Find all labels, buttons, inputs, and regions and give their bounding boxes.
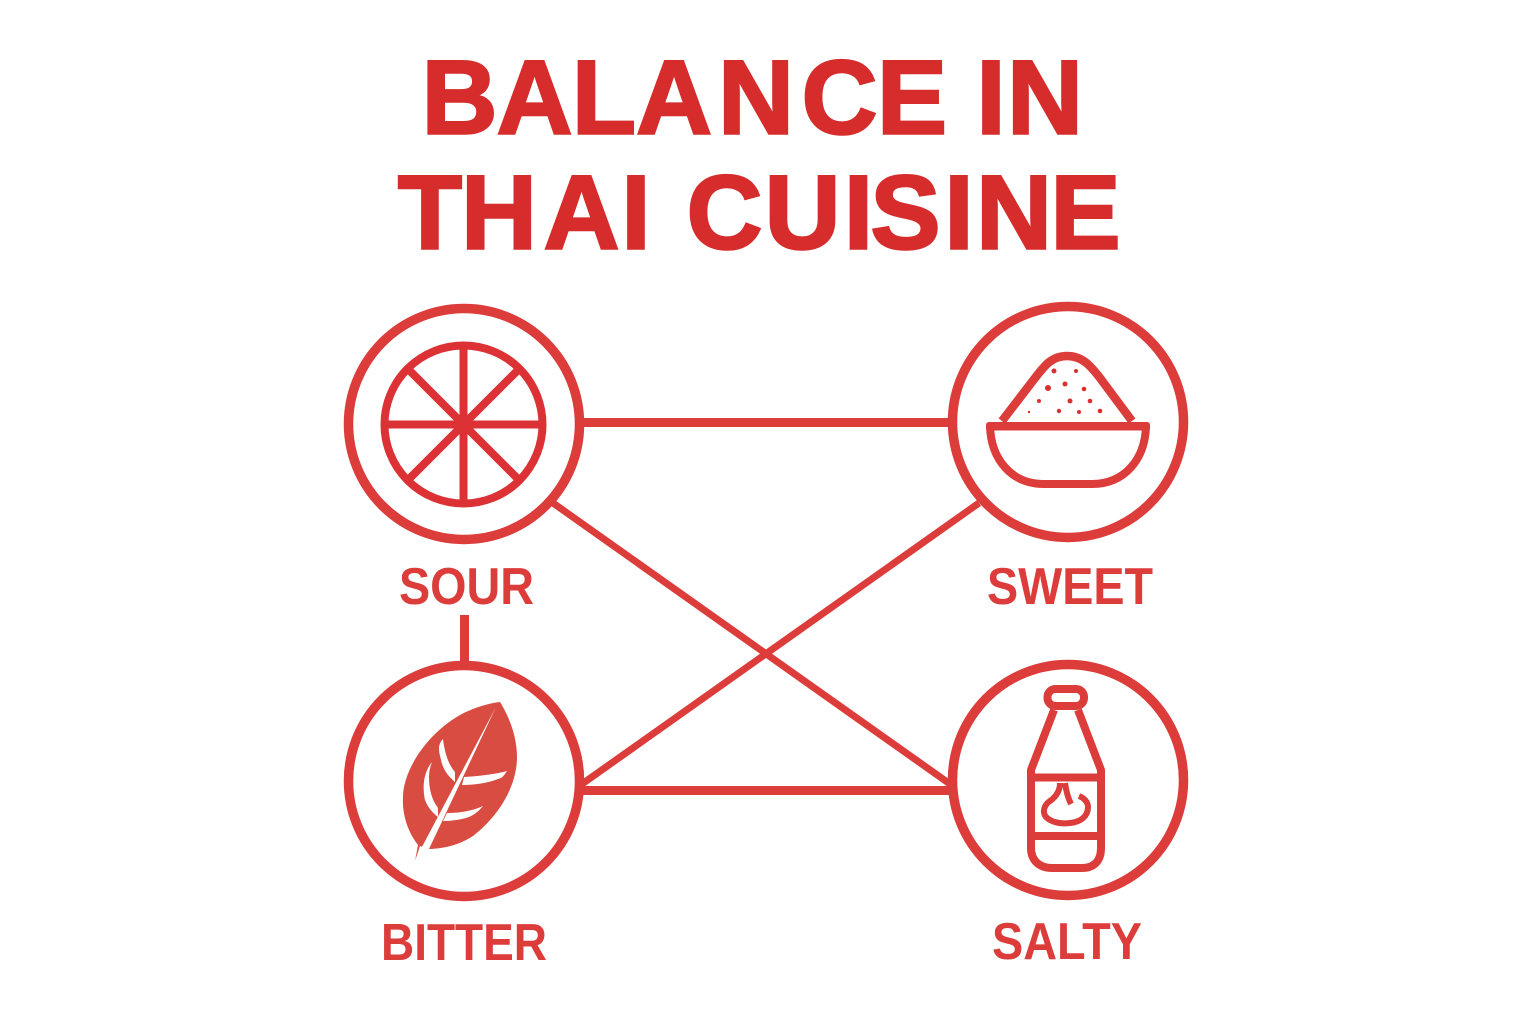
panel: salty [952,664,1184,971]
label: sour: SOUR [399,558,534,616]
panel: sweet [952,306,1184,616]
label: sweet: SWEET [987,558,1153,616]
title: BALANCE IN [422,40,1083,157]
sour circle [348,308,580,540]
label: salty: SALTY [992,913,1142,971]
title: THAI CUISINE [398,155,1121,272]
icon: bowl of sugar [986,356,1150,484]
panel: sour [348,308,580,616]
panel: bitter [348,666,580,972]
bitter circle [348,666,580,896]
sweet circle [952,306,1184,538]
title [398,40,1121,272]
label: bitter: BITTER [381,914,547,972]
salty circle [952,664,1184,896]
icon: leaf [403,702,517,862]
connecting lines [464,422,979,790]
icon: lime slice [384,346,542,504]
icon: bottle [1031,689,1101,868]
